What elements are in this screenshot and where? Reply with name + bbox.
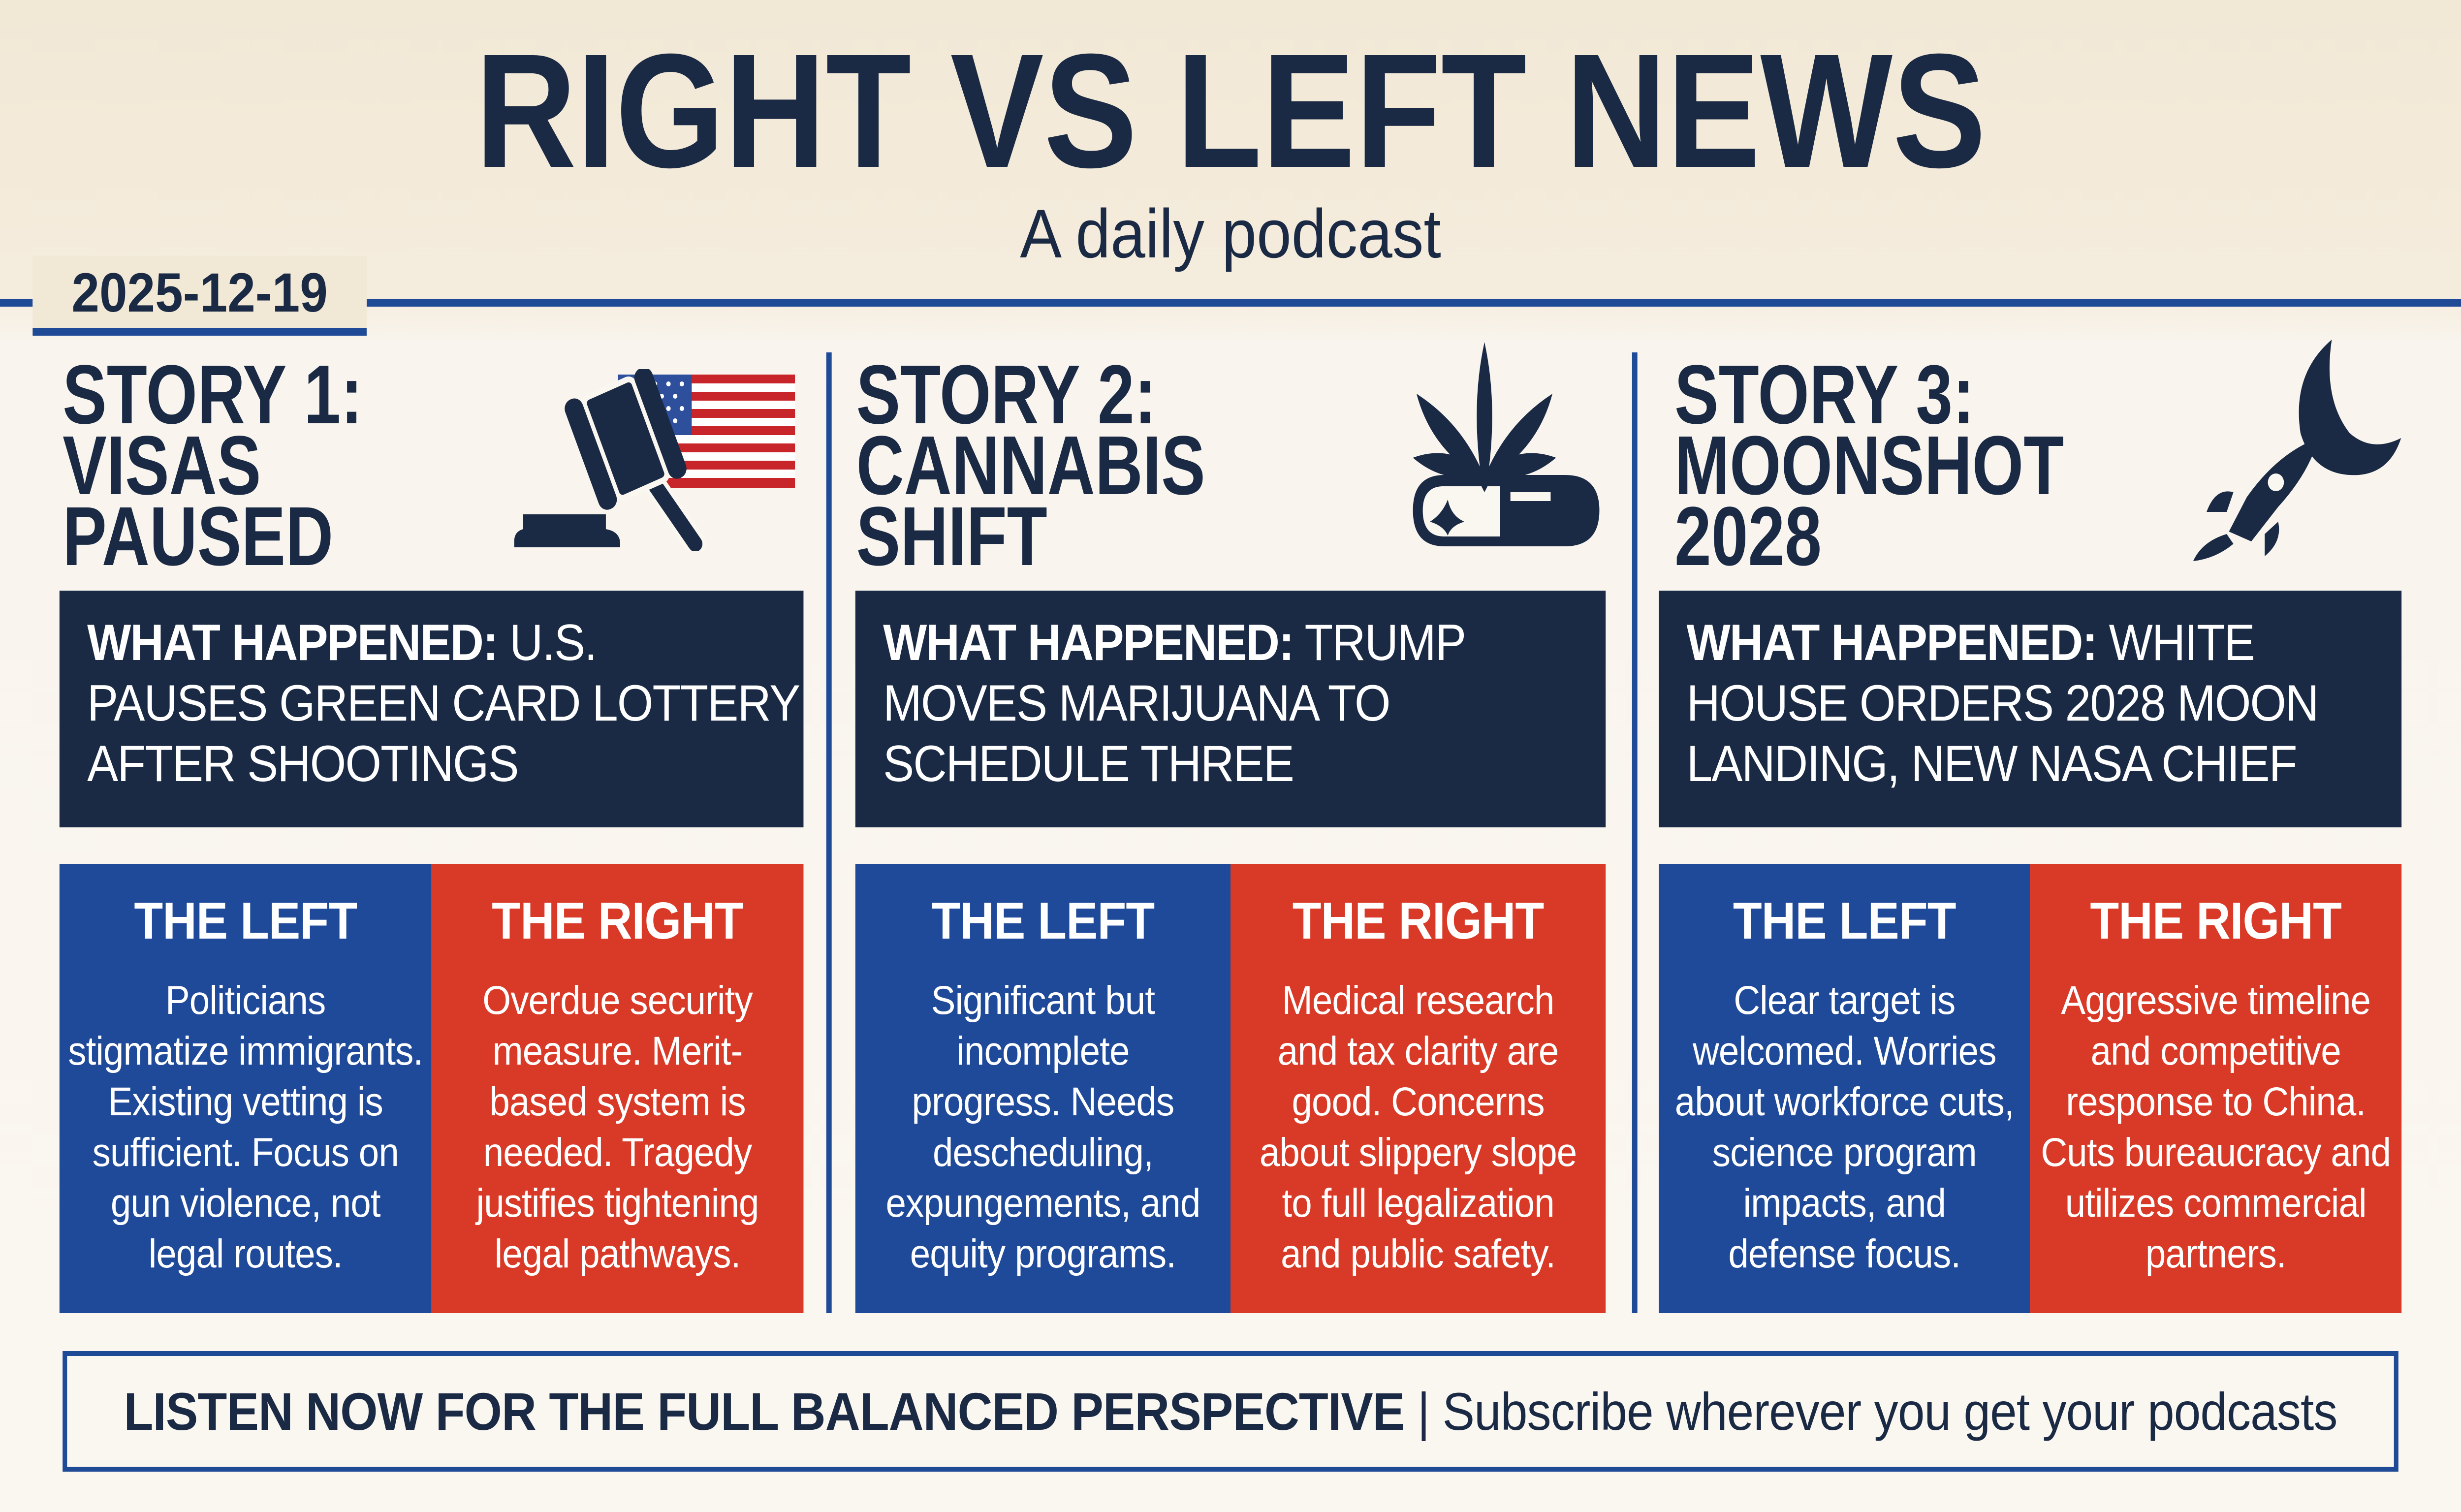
left view: progress. Needs bbox=[912, 1079, 1174, 1124]
story 1 heading: PAUSED bbox=[63, 490, 333, 583]
right view: about slippery slope bbox=[1260, 1130, 1577, 1175]
right view: Medical research bbox=[1282, 978, 1554, 1023]
right view: and public safety. bbox=[1281, 1231, 1555, 1276]
story 1 heading: STORY 1: bbox=[63, 348, 363, 441]
icon: gavel and flag bbox=[514, 369, 795, 551]
left view: legal routes. bbox=[149, 1231, 343, 1276]
story 3 heading: 2028 bbox=[1674, 490, 1822, 583]
left view: THE LEFT bbox=[1733, 892, 1956, 950]
what happened box: WHAT HAPPENED: WHITE bbox=[1687, 614, 2254, 671]
panel: story 3 bbox=[1659, 340, 2402, 1313]
left view: welcomed. Worries bbox=[1693, 1029, 1996, 1073]
right view: THE RIGHT bbox=[1293, 892, 1544, 950]
call to action banner: LISTEN NOW FOR THE FULL BALANCED PERSPECTIVE | Subscribe wherever you get your podcasts bbox=[124, 1382, 2337, 1441]
left view: THE LEFT bbox=[134, 892, 357, 950]
right view: response to China. bbox=[2066, 1079, 2366, 1124]
what happened box: WHAT HAPPENED: U.S. bbox=[87, 614, 597, 671]
right view: Overdue security bbox=[482, 978, 753, 1023]
left view bbox=[1659, 864, 2030, 1313]
left view: equity programs. bbox=[910, 1231, 1176, 1276]
story 1 heading bbox=[63, 348, 363, 583]
what happened box: HOUSE ORDERS 2028 MOON bbox=[1687, 675, 2318, 732]
what happened box: LANDING, NEW NASA CHIEF bbox=[1687, 735, 2297, 792]
right view: THE RIGHT bbox=[492, 892, 743, 950]
panel: story 2 bbox=[855, 342, 1606, 1313]
what happened box: AFTER SHOOTINGS bbox=[87, 735, 518, 792]
icon: rocket and moon bbox=[2193, 340, 2401, 561]
story 3 heading: STORY 3: bbox=[1674, 348, 1975, 441]
left view: Existing vetting is bbox=[108, 1079, 383, 1124]
right view: good. Concerns bbox=[1292, 1079, 1545, 1124]
right view: legal pathways. bbox=[495, 1231, 740, 1276]
call to action banner bbox=[63, 1351, 2398, 1472]
icon: cannabis and pill bbox=[1413, 342, 1600, 546]
left view: expungements, and bbox=[885, 1181, 1200, 1226]
story 3 heading: MOONSHOT bbox=[1674, 419, 2064, 512]
story 3 heading bbox=[1674, 348, 2064, 583]
left view bbox=[855, 864, 1230, 1313]
header rule left bbox=[0, 299, 32, 307]
what happened box: SCHEDULE THREE bbox=[883, 735, 1294, 792]
left view: about workforce cuts, bbox=[1675, 1079, 2014, 1124]
story 2 heading: STORY 2: bbox=[856, 348, 1156, 441]
left view: defense focus. bbox=[1728, 1231, 1960, 1276]
what happened box bbox=[60, 591, 803, 827]
left view: impacts, and bbox=[1743, 1181, 1946, 1226]
what happened box bbox=[1659, 591, 2401, 827]
subtitle: A daily podcast bbox=[1020, 195, 1441, 272]
story 2 heading: CANNABIS bbox=[856, 419, 1205, 512]
right view: and competitive bbox=[2091, 1029, 2341, 1073]
story 2 heading: SHIFT bbox=[856, 490, 1047, 583]
right view: needed. Tragedy bbox=[483, 1130, 752, 1175]
what happened box: MOVES MARIJUANA TO bbox=[883, 675, 1390, 732]
right view: partners. bbox=[2145, 1231, 2286, 1276]
header rule right bbox=[367, 299, 2461, 307]
story 2 heading bbox=[856, 348, 1205, 583]
column dividers bbox=[826, 352, 832, 1313]
right view: and tax clarity are bbox=[1278, 1029, 1558, 1073]
right view: based system is bbox=[489, 1079, 746, 1124]
right view: measure. Merit- bbox=[493, 1029, 743, 1073]
left view: descheduling, bbox=[933, 1130, 1153, 1175]
right view: to full legalization bbox=[1282, 1181, 1554, 1226]
left view: Significant but bbox=[931, 978, 1155, 1023]
left view: incomplete bbox=[956, 1029, 1129, 1073]
right view: Aggressive timeline bbox=[2061, 978, 2370, 1023]
what happened box: PAUSES GREEN CARD LOTTERY bbox=[87, 675, 799, 732]
right view: utilizes commercial bbox=[2065, 1181, 2366, 1226]
what happened box: WHAT HAPPENED: TRUMP bbox=[883, 614, 1465, 671]
left view: sufficient. Focus on bbox=[93, 1130, 399, 1175]
date tab: 2025-12-19 bbox=[71, 262, 328, 323]
panel: story 1 bbox=[59, 348, 803, 1313]
right view: Cuts bureaucracy and bbox=[2041, 1130, 2391, 1175]
divider 2 bbox=[1632, 352, 1638, 1313]
left view: gun violence, not bbox=[111, 1181, 380, 1226]
what happened box bbox=[855, 591, 1606, 827]
right view bbox=[1230, 864, 1606, 1313]
left view: stigmatize immigrants. bbox=[68, 1029, 423, 1073]
title: RIGHT VS LEFT NEWS bbox=[475, 20, 1986, 201]
left view: Politicians bbox=[165, 978, 325, 1023]
story 1 heading: VISAS bbox=[63, 419, 261, 512]
left view: THE LEFT bbox=[932, 892, 1154, 950]
date tab bbox=[32, 256, 367, 336]
right view bbox=[2030, 864, 2401, 1313]
right view: justifies tightening bbox=[476, 1181, 759, 1226]
right view: THE RIGHT bbox=[2090, 892, 2341, 950]
left view: science program bbox=[1712, 1130, 1977, 1175]
right view bbox=[432, 864, 803, 1313]
left view: Clear target is bbox=[1734, 978, 1955, 1023]
left view bbox=[60, 864, 432, 1313]
